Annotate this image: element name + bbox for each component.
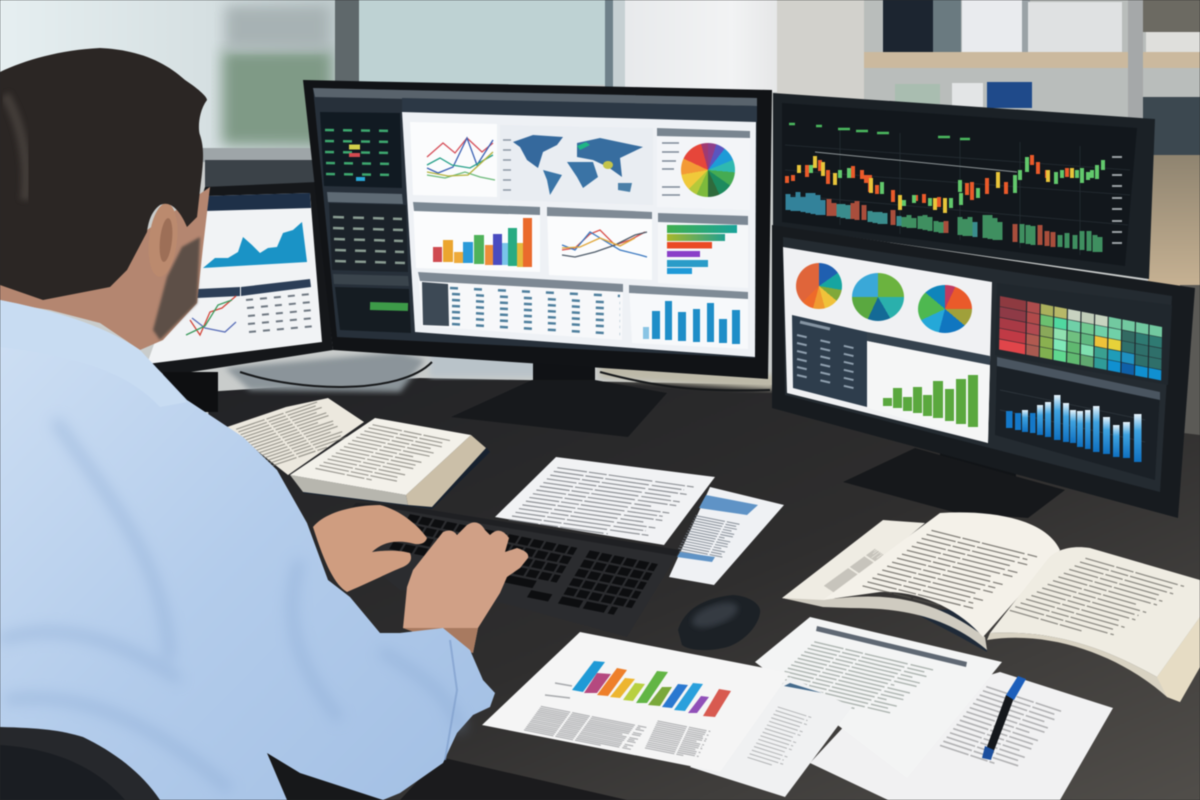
cover [303, 447, 490, 509]
monitor: left small [147, 182, 333, 412]
left sidebar tables [320, 112, 411, 333]
candlesticks [787, 155, 1103, 213]
page block side [406, 435, 486, 507]
bar chart card [413, 202, 540, 272]
white pies panel [783, 247, 992, 443]
left page [227, 398, 364, 475]
paper: left behind report [690, 677, 852, 797]
desk [205, 378, 1200, 800]
paper: bottom right sheet [810, 672, 1113, 800]
monitor: right lower dashboard [772, 225, 1195, 518]
table values [246, 294, 316, 332]
paper: second sheet with blue header [669, 487, 784, 585]
keyboard [345, 503, 680, 637]
beard [153, 237, 200, 340]
chart: pie two on lower right monitor [852, 273, 904, 321]
shirt [0, 300, 495, 800]
background: window and wall [0, 0, 1200, 420]
chart: pie one on lower right monitor [796, 263, 842, 309]
monitor stand: centre [451, 355, 667, 437]
chart: pie on centre monitor [681, 143, 735, 197]
chart: pie three on lower right monitor [918, 285, 972, 333]
shirt folds [0, 420, 460, 790]
bookshelf [864, 0, 1200, 440]
grid [785, 130, 1130, 255]
paper: first sheet of text [495, 457, 715, 545]
mouse [678, 595, 760, 650]
blue spike chart [995, 357, 1160, 480]
keys [378, 517, 656, 614]
paper: report sheet with table [755, 617, 1002, 778]
book cover shadow and spine [823, 607, 987, 652]
back left leaf [782, 520, 925, 606]
horizontal bar card [658, 213, 748, 288]
monitor: right upper with candlestick chart [773, 93, 1155, 279]
data table card [418, 272, 623, 340]
price scale [1112, 157, 1122, 243]
white dashboard panel [402, 112, 756, 357]
metrics table [792, 315, 867, 407]
screen [147, 193, 322, 364]
hand on left of keyboard [313, 505, 427, 592]
heatmap panel [995, 283, 1172, 385]
left page [823, 512, 1060, 637]
page block left [782, 596, 987, 650]
hand on right of keyboard [403, 522, 528, 653]
pie card [657, 127, 750, 210]
world map card [500, 125, 653, 205]
screen base [313, 88, 757, 358]
right page [990, 547, 1200, 677]
chair [0, 727, 160, 800]
page block right [987, 617, 1200, 702]
green bar chart [867, 332, 990, 443]
desk front edge shadow [400, 757, 627, 800]
top toolbar [313, 88, 757, 106]
pen [982, 676, 1026, 760]
right page [290, 418, 471, 495]
monitor: centre main [303, 80, 772, 379]
monitor stand: right [843, 448, 1065, 518]
ticker row [789, 124, 970, 139]
line chart card 2 [547, 207, 652, 280]
table headers [197, 287, 240, 298]
line chart card [410, 122, 497, 197]
collar [0, 300, 187, 407]
trend line [815, 152, 1017, 172]
laptop lid and background behind centre monitor [225, 345, 775, 392]
neck and face [0, 187, 210, 350]
open book: right desk [782, 512, 1200, 702]
wedge of dark desk under elbow [267, 753, 383, 800]
person: analyst seen from behind [0, 48, 528, 800]
hair [0, 48, 207, 300]
volume bars [788, 192, 1100, 252]
ear [145, 202, 181, 278]
open book: centre desk [227, 398, 490, 509]
blue bar card [629, 285, 748, 349]
cables [240, 362, 770, 390]
line chart [186, 296, 236, 335]
page block front [290, 475, 408, 505]
report page with bar chart [482, 632, 790, 772]
area chart [203, 222, 307, 268]
